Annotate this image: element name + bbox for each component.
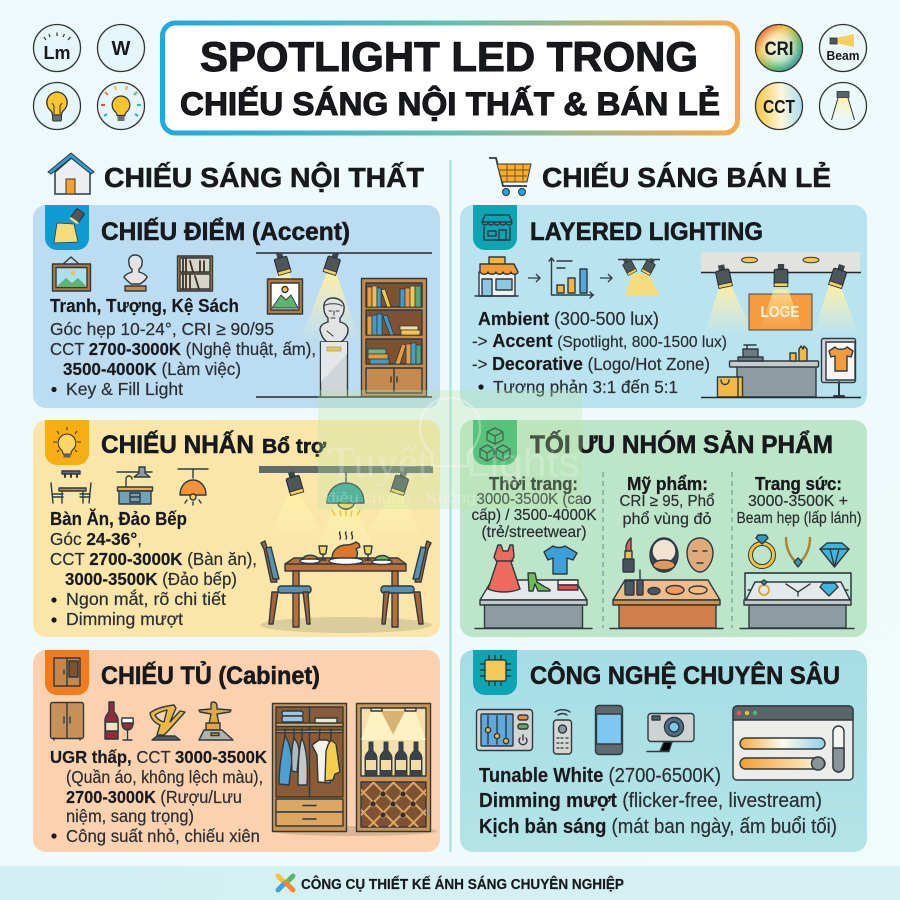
text block: jewellery: Beam hẹp (lấp lánh) [736,510,862,527]
panel: accent lighting [33,205,440,408]
text block: cabinet specification: 2700-3000K (Rượu/Lưu [66,787,242,807]
text block: accent specification: 3500-4000K (Làm việc) [63,359,241,379]
footer [0,866,900,900]
floor shadow under cabinets [273,826,437,836]
bust on pedestal [320,298,348,397]
icon: camera [647,714,694,752]
text block: technology features: Dimming mượt (flicker-free, livestream) [479,790,822,812]
text block: fashion: cấp) / 3500-4000K [472,507,597,524]
text block: supplementary specification: Ngon mắt, rõ chi tiết [66,588,226,609]
checkout counter [730,345,818,397]
icon: remote control [554,710,572,754]
icon: beam badge: Beam [826,49,860,63]
text block: cosmetics [620,474,714,528]
heading: accent: CHIẾU ĐIỂM (Accent) [101,217,350,246]
illustration: gallery scene [256,251,432,397]
text block: supplementary specification: Dimming mượt [66,609,183,629]
illustration: wine cabinet [356,702,432,832]
icon: small wardrobe [50,702,84,740]
watermark: Tuyết [328,438,430,487]
heading: product groups: TỐI ƯU NHÓM SẢN PHẨM [530,429,833,459]
text block: fashion: Thời trang: [489,474,578,494]
arrow: shop to chart [528,274,540,282]
icon: bulb badge [34,82,80,130]
illustration: retail store [701,252,861,398]
pendant lamp [327,473,364,516]
light beams [268,494,326,540]
illustration: wardrobe [272,704,346,832]
title box: SPOTLIGHT LED TRONG [200,33,698,80]
heading: technology: CÔNG NGHỆ CHUYÊN SÂU [530,660,840,690]
text block: supplementary specification: Bàn Ăn, Đảo Bếp [50,508,187,529]
roast chicken and dishes [300,532,392,564]
text block: fashion: (trẻ/streetwear) [482,524,586,541]
icon: cabinet tab [45,650,89,695]
heading: supplementary: CHIẾU NHẤN [101,430,254,459]
panel: advanced technology [460,650,867,852]
text block: technology features: Kịch bản sáng (mát ban ngày, ấm buổi tối) [479,816,837,838]
icon: small bust [124,255,147,291]
icon: shopping cart [489,158,531,196]
panel: layered lighting [460,205,867,408]
logo sign [749,294,812,330]
dining table [261,541,431,627]
illustration: jewellery display [740,535,854,628]
icon: CCT badge [756,82,802,130]
track spot right [391,470,410,496]
icon: pendant lamp small [178,469,208,505]
text block: cosmetics: phổ vùng đỏ [622,511,712,528]
text block: technology features [479,765,837,838]
column dividers [603,472,732,628]
text block: jewellery [736,474,862,527]
icon: CRI badge [756,24,802,72]
icon: watt badge [98,24,144,72]
text block: fashion [472,474,597,541]
icon: boxes tab [473,420,517,465]
text block: layered formula: Tương phản 3:1 đến 5:1 [493,377,678,397]
illustration: dining scene [259,466,433,633]
heading: interior lighting [48,153,424,194]
text block: layered formula: Ambient (300-500 lux) [478,308,659,329]
text block: jewellery: 3000-3500K + [748,493,848,510]
text block: supplementary specification: 3000-3500K (Đảo bếp) [65,569,237,589]
icon: statue souvenir [199,702,233,740]
icon: trophy sculpture [150,705,185,740]
icon: storefront tab [473,205,517,250]
footer: CÔNG CỤ THIẾT KẾ ÁNH SÁNG CHUYÊN NGHIỆP [301,875,624,893]
text block: accent specification [50,295,316,399]
text block: cabinet specification: Công suất nhỏ, chiếu xiên [66,826,260,846]
text block: layered formula: -> Decorative (Logo/Hot Zone) [472,353,710,374]
title box [162,23,738,133]
heading: supplementary [101,430,327,459]
text block: cabinet specification [50,747,267,846]
icon: smartphone [596,706,622,754]
icon: bulb tab [45,420,89,465]
icon: lumen badge [34,24,80,72]
ceiling rail [259,466,433,473]
arrow: chart to spot [600,274,612,282]
text block: cosmetics: Mỹ phẩm: [627,474,708,494]
icon: accent spotlight tab [45,205,89,250]
icon: beam badge [820,24,866,72]
text block: accent specification: Key & Fill Light [66,379,183,399]
text block: cabinet specification: (Quần áo, không lệch màu), [66,767,263,787]
icon: lumen badge: Lm [44,43,70,63]
icon: small bookshelf [178,256,212,291]
shopping bag [718,377,742,397]
icon: track spot pair [618,257,660,296]
icon: kitchen island [117,467,152,504]
text block: layered formula: -> Accent (Spotlight, 800-1500 lux) [472,330,727,351]
watermark: điêu chuẩn - Không [326,490,476,507]
t-shirt display sign [822,338,856,396]
heading: supplementary: Bổ trợ [262,436,327,458]
heading: retail lighting: CHIẾU SÁNG BÁN LẺ [542,161,831,193]
illustration: fashion display [475,545,592,628]
illustration: cosmetics display [610,538,723,628]
text block: accent specification: CCT 2700-3000K (Nghệ thuật, ấm), [50,339,316,359]
heading: retail lighting [489,158,831,196]
track spotlights [273,251,291,275]
text block: cabinet specification: niệm, sang trọng) [66,806,194,826]
heading: interior lighting: CHIẾU SÁNG NỘI THẤT [104,161,424,193]
icon: CCT badge: CCT [763,97,795,117]
icon: dining set [51,471,91,503]
text block: technology features: Tunable White (2700-6500K) [479,765,721,787]
text block: jewellery: Trang sức: [755,474,842,494]
icon: chip tab [473,650,517,695]
icon: footer logo [278,876,293,890]
text block: layered formula [472,308,727,397]
icon: control panel [476,710,532,750]
icon: shop front [475,257,518,296]
light beams [268,271,308,309]
text block: supplementary specification [50,508,257,629]
icon: watt badge: W [112,38,131,60]
watermark: Lights [466,441,580,485]
panel: supplementary lighting [33,420,440,637]
text block: accent specification: Góc hẹp 10-24°, CRI ≥ 90/95 [50,319,274,339]
icon: wine bottle and glass [105,702,133,740]
logo sign: LOGE [760,304,800,321]
icon: dimmer app window [733,706,853,780]
track spot left [284,470,304,496]
floor shadow [260,617,432,633]
heading: layered lighting: LAYERED LIGHTING [530,218,763,246]
divider between sections [450,160,452,852]
icon: house [48,153,94,194]
icon: CRI badge: CRI [764,39,794,60]
bookcase [362,278,426,396]
title box: CHIẾU SÁNG NỘI THẤT & BÁN LẺ [180,86,720,122]
text block: fashion: 3000-3500K (cao [476,491,592,508]
text block: cabinet specification: UGR thấp, CCT 3000-3500K [50,747,267,767]
text block: supplementary specification: Góc 24-36°, [50,529,142,549]
watermark [318,390,582,509]
icon: framed painting [52,257,90,291]
panel: cabinet lighting [33,650,458,852]
text block: cosmetics: CRI ≥ 95, Phổ [620,493,714,510]
heading: cabinet: CHIẾU TỦ (Cabinet) [101,660,320,690]
panel: product group optimisation [460,420,867,637]
text block: supplementary specification: CCT 2700-3000K (Bàn ăn), [50,549,257,569]
wall painting [268,279,302,314]
icon: lighting level chart [549,258,594,298]
icon: downlight badge [820,82,866,130]
icon: colour bulb badge [98,82,144,130]
text block: accent specification: Tranh, Tượng, Kệ Sách [50,295,239,316]
